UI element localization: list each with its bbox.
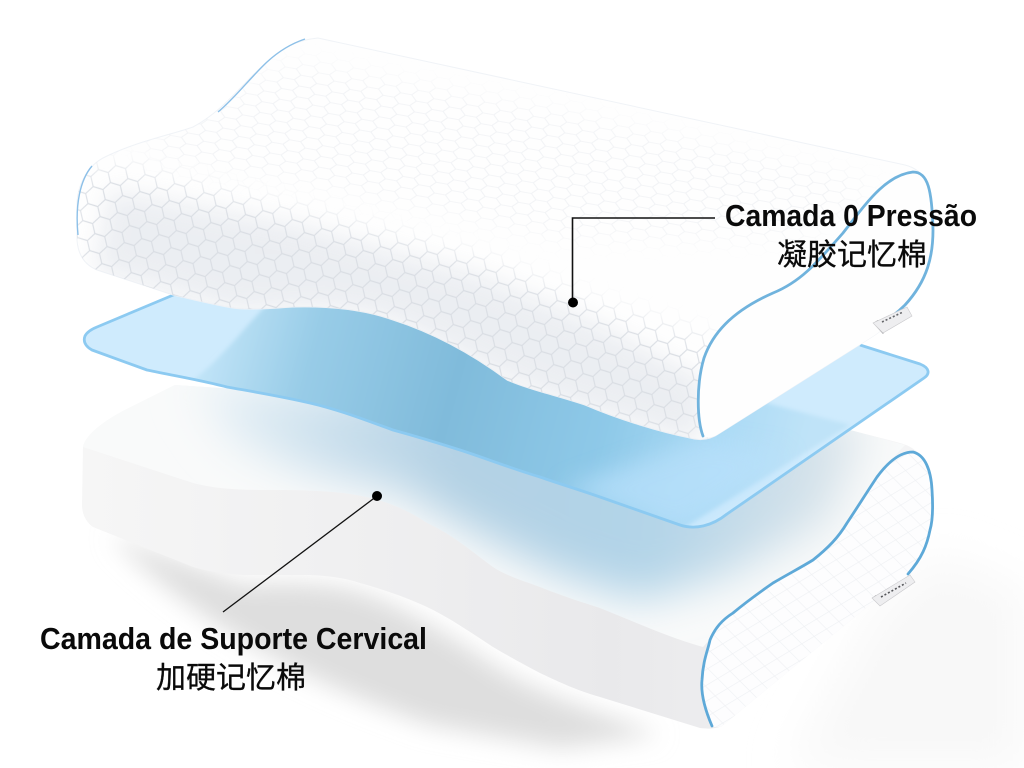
upper pillow left piping — [77, 39, 305, 235]
lower pillow body — [82, 385, 932, 729]
label: Camada de Suporte Cervical: Camada de Suporte Cervical — [40, 621, 427, 656]
upper pillow end panel — [698, 172, 933, 437]
upper pillow: zero pressure layer — [60, 30, 940, 450]
label: Camada 0 Pressão: Camada 0 Pressão — [725, 198, 977, 233]
marker dot: lower — [372, 491, 382, 501]
upper pillow body — [77, 38, 933, 440]
lower pillow end panel — [703, 454, 930, 727]
upper pillow tag — [873, 307, 912, 334]
callout: lower layer — [40, 491, 427, 695]
upper pillow piping — [698, 172, 933, 436]
gel sheet edge — [84, 288, 928, 527]
label: 凝胶记忆棉: 凝胶记忆棉 — [777, 239, 927, 272]
lower pillow top surface — [226, 391, 857, 647]
callout: upper layer — [568, 198, 977, 308]
lower pillow tag — [872, 575, 915, 606]
upper pillow quilted texture — [77, 68, 848, 438]
label: 加硬记忆棉: 加硬记忆棉 — [156, 662, 306, 695]
gel sheet layer — [82, 294, 930, 528]
lower pillow: cervical support layer — [60, 370, 940, 735]
gel sheet surface — [86, 296, 927, 526]
floor shadow — [110, 535, 1024, 768]
marker dot: upper — [568, 298, 578, 308]
lower pillow piping — [702, 452, 933, 726]
leader line: lower — [223, 496, 377, 612]
leader line: upper — [572, 218, 715, 302]
